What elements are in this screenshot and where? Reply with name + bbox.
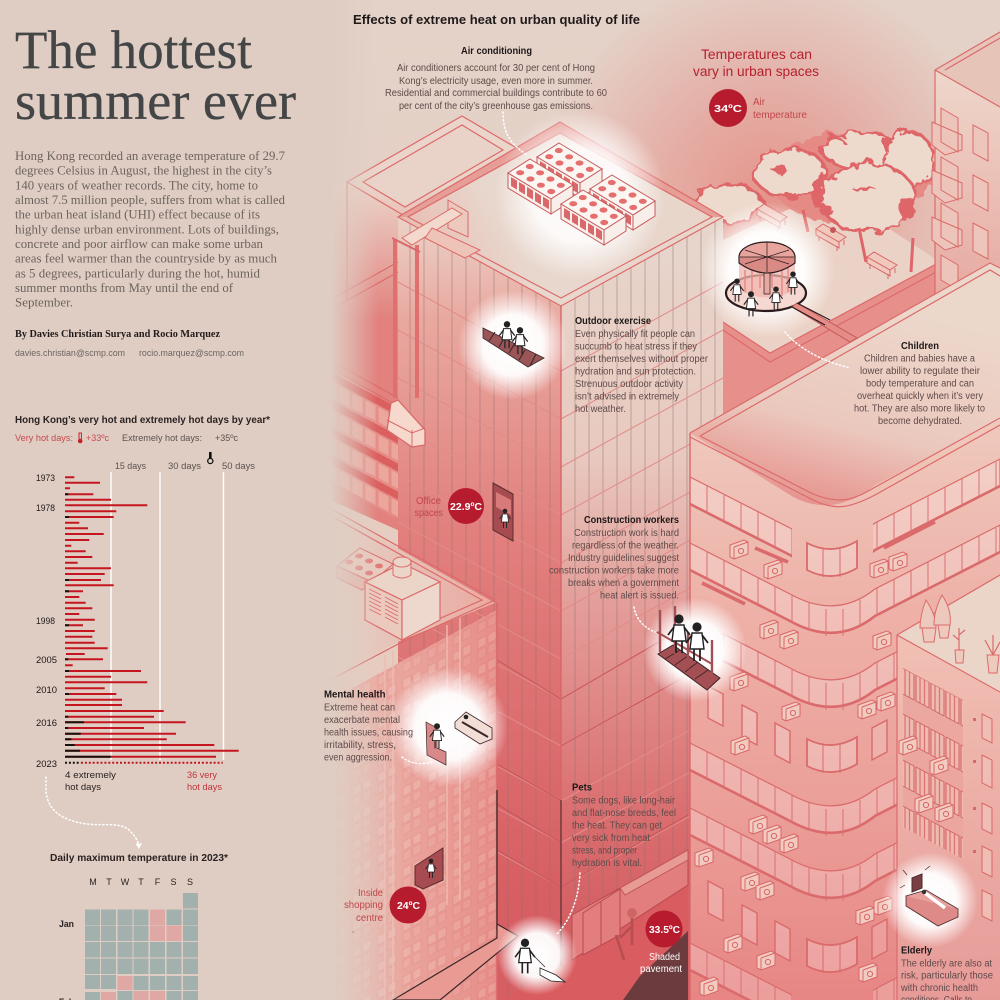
text block: children: hot. They are also more likely to (854, 404, 985, 414)
2023 annotations: hot days (187, 782, 222, 793)
text block: children: body temperature and can (866, 378, 974, 390)
temperature marker: air temperature: 34ºC (714, 103, 742, 115)
text block: air conditioning: Air conditioners account for 30 per cent of Hong (397, 63, 595, 74)
text block: air conditioning: Residential and commercial buildings contribute to 60 (385, 88, 607, 99)
street, storefront and shaded pavement (393, 850, 688, 1000)
icon: water carousel with children (726, 242, 857, 342)
year labels: 1998 (36, 616, 55, 627)
leader: pets (557, 873, 580, 934)
text block: mental health: Mental health (324, 690, 386, 700)
icon: shopper in window (415, 848, 443, 889)
byline (15, 329, 244, 359)
glow: air conditioning (502, 116, 662, 272)
2023 annotations: hot days (65, 782, 101, 793)
leader: mental health (402, 757, 432, 764)
byline: By Davies Christian Surya and Rocio Marquez (15, 329, 220, 340)
text block: pets: and flat-nose breeds, feel (572, 808, 676, 819)
icon: outdoor exercise treadmills (483, 321, 544, 367)
year labels: 1973 (36, 473, 55, 484)
intro text block: September. (15, 296, 73, 310)
month labels: Jan (59, 919, 74, 930)
back-left building (334, 115, 516, 530)
year labels (36, 473, 57, 770)
axis lines (111, 472, 224, 760)
text block: air conditioning: Air conditioning (461, 46, 532, 57)
text block: mental health: even aggression. (324, 752, 392, 764)
axis labels: 50 days (222, 461, 255, 472)
heading: temperatures can vary: Temperatures can (701, 47, 812, 62)
temperature marker: inside shopping centre: shopping (344, 900, 383, 911)
text block: pets: Pets (572, 782, 592, 794)
text block: outdoor exercise: isn’t advised in extremely (575, 392, 679, 402)
intro text block: almost 7.5 million people, suffers from what is called (15, 193, 285, 207)
bar chart: very hot and extremely hot days (36, 452, 255, 793)
text block: construction workers (549, 515, 679, 602)
text block: construction workers: heat alert is issued. (600, 590, 679, 602)
text block: mental health: irritability, stress, (324, 740, 396, 751)
title: The hottest (15, 20, 252, 80)
weekday labels: S (170, 877, 177, 887)
glow: elderly (882, 852, 978, 948)
right large curved building (690, 263, 1000, 1000)
intro text block: Hong Kong recorded an average temperature of 29.7 (15, 149, 285, 163)
text block: construction workers: Construction work is hard (574, 528, 679, 539)
heading: temperatures can vary (693, 47, 819, 79)
intro text block: the urban heat island (UHI) effect because of its (15, 208, 260, 222)
text block: children: overheat quickly when it’s very (857, 391, 983, 402)
text block: pets: the heat. They can get (572, 820, 662, 832)
glow: outdoor exercise (458, 290, 568, 400)
text block: air conditioning: per cent of the city’s greenhouse gas emissions. (399, 101, 593, 112)
text block: elderly (900, 946, 993, 1000)
intro text block: summer months from May until the end of (15, 281, 234, 295)
weekday labels: F (155, 877, 161, 887)
year labels: 1978 (36, 503, 55, 514)
icon: mental health armchair and sofa figures (426, 712, 492, 765)
icon: rooftop air conditioner units (508, 143, 655, 245)
temperature marker: inside shopping centre: centre (356, 913, 383, 924)
text block: construction workers: Industry guidelines suggest (568, 553, 679, 564)
year labels: 2016 (36, 718, 57, 729)
temperature marker: inside shopping centre: 24ºC (397, 900, 420, 912)
text block: outdoor exercise: succumb to heat stress if they (575, 342, 697, 352)
chart legend: Extremely hot days: (122, 433, 202, 444)
cells above 30 degrees (101, 910, 182, 1000)
text block: elderly: with chronic health (900, 983, 978, 994)
axis labels: 15 days (115, 461, 146, 472)
main tower (398, 217, 723, 1000)
weekday labels (89, 877, 193, 887)
temperature marker: office spaces: Office (416, 496, 441, 507)
arrow: chart to calendar (46, 777, 142, 849)
text block: elderly: The elderly are also at (901, 958, 992, 970)
front-right building with plants (897, 575, 1000, 1000)
panel: isometric city illustration (330, 0, 1000, 1000)
rooftop duct and wall pipes (392, 200, 480, 398)
air conditioner units on curved building (695, 522, 935, 996)
top-right building with balconies (932, 32, 1000, 294)
text block: pets: hydration is vital. (572, 858, 642, 869)
cells below 30 degrees (85, 893, 198, 1000)
text block: outdoor exercise: hydration and sun protection. (575, 366, 696, 378)
2023 annotations (65, 770, 222, 793)
text block: elderly: Elderly (901, 946, 932, 956)
glow: mental health (388, 667, 508, 787)
extremely hot day bars (65, 494, 111, 757)
text block: outdoor exercise: hot weather. (575, 404, 626, 415)
text block: children: Children and babies have a (864, 354, 975, 364)
temperature marker: inside shopping centre: Inside (358, 888, 383, 899)
text block: pets (572, 782, 676, 869)
text block: children: Children (901, 341, 939, 352)
chart legend: +35ºc (215, 433, 238, 444)
text block: air conditioning: Kong’s electricity usage, even more in summer. (399, 76, 593, 87)
year labels: 2010 (36, 685, 57, 696)
byline: davies.christian@scmp.com (15, 348, 125, 359)
temperature marker: shaded pavement (640, 910, 682, 975)
text block: mental health (324, 690, 413, 764)
2023 dotted bars (81, 762, 223, 764)
leader: construction (634, 607, 655, 632)
glow: construction workers (643, 598, 747, 702)
month labels (59, 919, 74, 1000)
byline: rocio.marquez@scmp.com (139, 348, 244, 359)
tower roof with parapet (398, 122, 723, 306)
text block: outdoor exercise: exert themselves without proper (575, 354, 709, 365)
very hot day bars (65, 477, 239, 757)
leader: air conditioning (503, 112, 527, 155)
temperature marker: shaded pavement: pavement (640, 964, 682, 975)
temperature marker: inside shopping centre (344, 886, 426, 924)
axis labels: 30 days (168, 461, 201, 472)
intro text block: areas feel warmer than the countryside by as much (15, 252, 277, 266)
icon: elderly person on bed with fan (900, 866, 958, 926)
temperature marker: office spaces (414, 488, 484, 524)
icon: person walking a dog (515, 939, 565, 982)
text block: construction workers: regardless of the weather. (572, 540, 679, 552)
heading: temperatures can vary: vary in urban spaces (693, 64, 819, 79)
intro text block: 140 years of weather records. The city, home to (15, 178, 258, 192)
temperature marker: office spaces: 22.9ºC (450, 501, 482, 513)
small mark near shopping centre (352, 931, 354, 933)
year labels: 2005 (36, 655, 57, 666)
text block: mental health: exacerbate mental (324, 715, 400, 726)
icon: rooftop fan unit and cooling tower (337, 548, 440, 640)
text block: outdoor exercise: Outdoor exercise (575, 316, 651, 327)
text block: pets: stress, and proper (572, 846, 638, 856)
title: summer ever (15, 71, 296, 131)
2023 annotations: 4 extremely (65, 770, 116, 781)
calendar heading: Daily maximum temperature in 2023* (50, 852, 229, 864)
temperature marker: air temperature: Air (753, 97, 766, 108)
text block: children: become dehydrated. (878, 416, 962, 427)
icon: black thermometer (208, 452, 213, 464)
temperature marker: shaded pavement: Shaded (649, 952, 680, 963)
text block: mental health: Extreme heat can (324, 702, 395, 714)
chart legend (15, 433, 238, 444)
icon: red thermometer (78, 433, 82, 443)
weekday labels: W (121, 877, 130, 887)
weekday labels: S (187, 877, 193, 887)
weekday labels: T (138, 877, 144, 887)
title (15, 20, 296, 131)
temperature marker: air temperature: temperature (753, 110, 807, 121)
text block: children: lower ability to regulate their (860, 366, 981, 377)
icon: office worker in window (493, 483, 513, 541)
temperature marker: office spaces: spaces (414, 508, 443, 519)
weekday labels: M (89, 877, 97, 887)
icon: wall-mounted unit (387, 400, 425, 447)
chart legend: Very hot days: (15, 433, 73, 444)
text block: outdoor exercise (575, 316, 709, 415)
temperature marker: air temperature (709, 89, 807, 127)
text block: children (854, 341, 985, 427)
calendar heatmap (59, 877, 198, 1000)
text block: outdoor exercise: Even physically fit people can (575, 329, 695, 340)
glow: children (704, 204, 830, 333)
axis labels (115, 461, 255, 472)
intro text block: highly dense urban environment. Lots of buildings, (15, 222, 279, 236)
2023 annotations: 36 very (187, 770, 217, 781)
text block: construction workers: Construction workers (584, 515, 679, 526)
park platform with trees and benches (694, 132, 940, 435)
intro text block: degrees Celsius in August, the highest in the city’s (15, 164, 272, 178)
intro text block: as 5 degrees, particularly during the hot, humid (15, 266, 260, 280)
text block: construction workers: breaks when a government (568, 578, 679, 589)
chart heading: Hong Kong’s very hot and extremely hot days by year* (15, 414, 271, 426)
intro text block: concrete and poor airflow can make some urban (15, 237, 263, 251)
icon: construction scaffold with workers (657, 606, 720, 690)
text block: outdoor exercise: Strenuous outdoor activity (575, 379, 683, 390)
left edge fade (330, 166, 402, 1000)
leader: children (785, 332, 850, 368)
text block: construction workers: construction workers take more (549, 566, 679, 576)
chart legend: +33ºc (86, 433, 109, 444)
year labels: 2023 (36, 759, 57, 770)
heading: effects of extreme heat: Effects of extreme heat on urban quality of life (353, 13, 640, 27)
intro text block (15, 149, 285, 310)
lower-left building (330, 510, 497, 1000)
text block: air conditioning (385, 46, 607, 112)
weekday labels: T (106, 877, 112, 887)
temperature marker: shaded pavement: 33.5ºC (649, 924, 680, 936)
side windows on curved building (708, 686, 887, 961)
text block: pets: very sick from heat (572, 833, 650, 844)
text block: mental health: health issues, causing (324, 728, 413, 738)
glow: pets (497, 915, 577, 995)
text block: elderly: risk, particularly those (901, 970, 993, 982)
text block: pets: Some dogs, like long-hair (572, 796, 676, 806)
